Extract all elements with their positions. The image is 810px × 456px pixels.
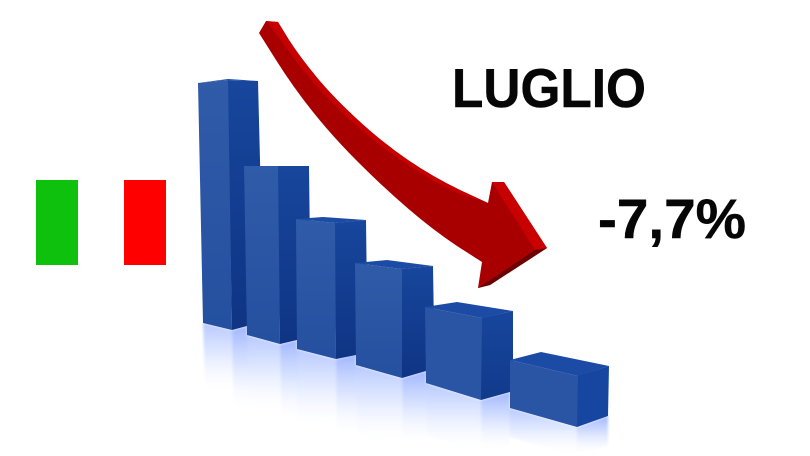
bar 3 bbox=[296, 217, 367, 359]
bar 2 bbox=[244, 166, 310, 344]
bar chart: falling 3D bars bbox=[198, 79, 609, 427]
bar 5 bbox=[425, 302, 513, 400]
arrow head underside bbox=[478, 248, 547, 288]
arrow body bbox=[259, 21, 547, 288]
heading: month: LUGLIO bbox=[452, 57, 646, 119]
value: percentage change: -7,7% bbox=[598, 187, 746, 250]
red downward arrow bbox=[259, 21, 547, 288]
bar 4 bbox=[355, 260, 434, 378]
bar reflections bbox=[203, 323, 608, 456]
arrow head bevel bbox=[492, 182, 547, 250]
bar 6 bbox=[510, 352, 609, 427]
arrow top highlight bbox=[266, 21, 488, 203]
flag of Italy bbox=[36, 180, 166, 265]
bar 1 bbox=[198, 79, 262, 330]
